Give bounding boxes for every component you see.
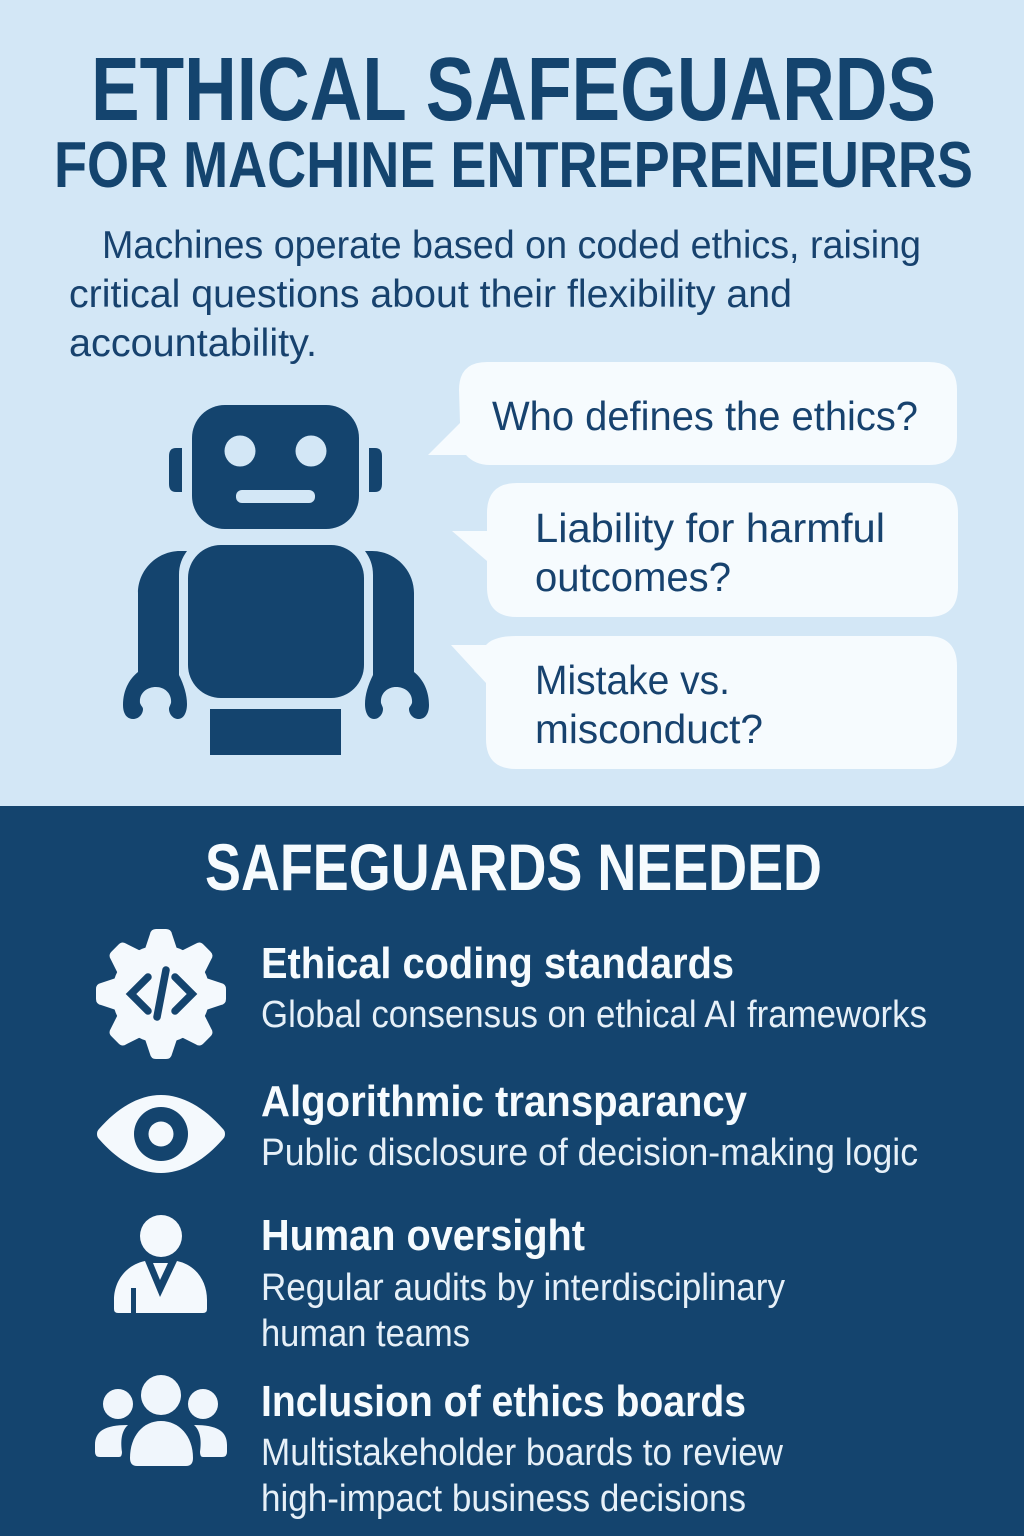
text: inclusion of ethics boards: Multistakeholder boards to review [261,1432,784,1474]
speech bubble: liability: outcomes? [535,554,731,600]
text: algorithmic transparency [261,1077,918,1174]
title [54,40,973,201]
text: ethical coding standards [261,939,927,1036]
text: human oversight [261,1211,785,1355]
intro text block: Machines operate based on coded ethics, raising [102,224,921,267]
panel: top light background [0,0,1024,806]
icon: gear with code [96,929,226,1059]
text: ethical coding standards: Ethical coding standards [261,939,734,988]
icon: group of people [95,1375,227,1466]
icon: person [114,1215,207,1313]
speech bubble: who defines the ethics [428,362,957,465]
text: algorithmic transparency: Public disclosure of decision-making logic [261,1132,918,1174]
speech bubble: liability [452,483,958,617]
heading: safeguards needed: SAFEGUARDS NEEDED [205,830,822,904]
speech bubble: mistake vs misconduct [451,636,957,769]
speech bubble: liability: Liability for harmful [535,505,885,551]
intro text block: critical questions about their flexibility and [69,273,792,316]
intro text block [69,224,921,365]
speech bubble: mistake vs misconduct: misconduct? [535,706,763,752]
text: inclusion of ethics boards: high-impact business decisions [261,1478,746,1520]
text: inclusion of ethics boards: Inclusion of ethics boards [261,1377,746,1426]
icon: eye [97,1095,225,1173]
speech bubble: who defines the ethics: Who defines the ethics? [492,393,918,439]
text: ethical coding standards: Global consensus on ethical AI frameworks [261,994,927,1036]
text: human oversight: Regular audits by interdisciplinary [261,1267,785,1309]
intro text block: accountability. [69,322,317,365]
text: algorithmic transparency: Algorithmic transparancy [261,1077,747,1126]
text: human oversight: human teams [261,1313,470,1355]
icon: robot [123,405,429,755]
text: inclusion of ethics boards [261,1377,784,1520]
speech bubble: mistake vs misconduct: Mistake vs. [535,657,730,703]
text: human oversight: Human oversight [261,1211,585,1260]
panel: safeguards needed [0,806,1024,1536]
